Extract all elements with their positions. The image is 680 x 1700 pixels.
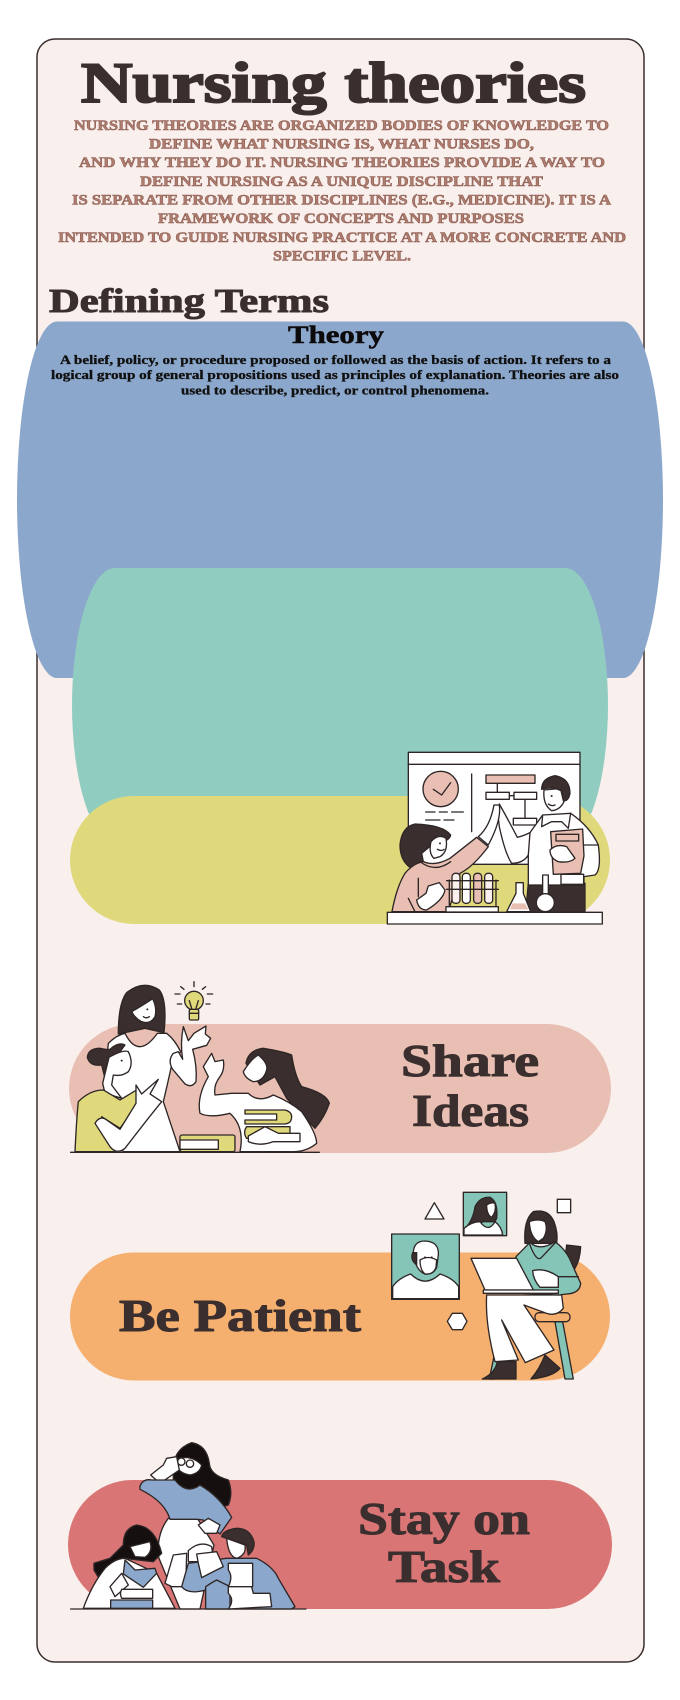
- heading: theory: Theory: [288, 322, 385, 349]
- theory definition: used to describe, predict, or control phenomena.: [181, 384, 489, 398]
- theory definition: [51, 353, 619, 398]
- woman at laptop: [471, 1211, 581, 1379]
- intro text block: FRAMEWORK OF CONCEPTS AND PURPOSES: [158, 210, 524, 227]
- floor line: [71, 1150, 319, 1154]
- theory definition: A belief, policy, or procedure proposed or followed as the basis of action. It refers to a: [60, 353, 611, 367]
- standing woman with glasses: [140, 1443, 232, 1609]
- panel: green term: [72, 568, 608, 842]
- illustration: team solving a puzzle: [71, 1443, 306, 1609]
- illustration: high five in lab: [387, 752, 602, 924]
- video frame: woman: [463, 1192, 507, 1236]
- seated person in yellow: [75, 1044, 162, 1152]
- illustration: video call: [392, 1192, 581, 1379]
- table: [387, 912, 602, 924]
- woman: [392, 805, 500, 912]
- shapes: [425, 1199, 571, 1330]
- intro text block: DEFINE WHAT NURSING IS, WHAT NURSES DO,: [149, 136, 534, 152]
- seated woman with books: [199, 1048, 329, 1152]
- video frame: man: [392, 1234, 459, 1299]
- intro text block: IS SEPARATE FROM OTHER DISCIPLINES (E.G., MEDICINE). IT IS A: [72, 192, 611, 209]
- label: share ideas: [401, 1036, 539, 1136]
- intro text block: NURSING THEORIES ARE ORGANIZED BODIES OF KNOWLEDGE TO: [74, 117, 609, 134]
- title: Nursing theories: [81, 52, 586, 115]
- illustration: three people sharing ideas: [71, 982, 329, 1152]
- heading: defining terms: Defining Terms: [49, 283, 329, 320]
- bulb: [175, 982, 213, 1020]
- intro text block: INTENDED TO GUIDE NURSING PRACTICE AT A MORE CONCRETE AND: [58, 229, 626, 246]
- table line: [71, 1607, 306, 1611]
- standing woman: [105, 985, 211, 1152]
- intro text block: DEFINE NURSING AS A UNIQUE DISCIPLINE THAT: [140, 173, 543, 190]
- label: share ideas: Ideas: [412, 1086, 529, 1136]
- panel: theory: [17, 322, 663, 678]
- man: [498, 776, 599, 912]
- label: stay on task: Task: [388, 1542, 500, 1592]
- intro text block: [58, 117, 626, 265]
- panel: share ideas pill: [69, 1024, 611, 1153]
- label: be patient: Be Patient: [119, 1291, 361, 1341]
- lab equipment: [446, 873, 554, 912]
- label: stay on task: Stay on: [358, 1494, 530, 1544]
- large book: [180, 1135, 235, 1152]
- girl reading: [83, 1525, 187, 1608]
- label: stay on task: [358, 1494, 530, 1592]
- presentation board: [408, 752, 580, 864]
- label: share ideas: Share: [401, 1036, 539, 1086]
- panel: be patient pill: [70, 1252, 610, 1380]
- chair: [489, 1245, 581, 1379]
- theory definition: logical group of general propositions used as principles of explanation. Theories are also: [51, 368, 619, 382]
- intro text block: AND WHY THEY DO IT. NURSING THEORIES PROVIDE A WAY TO: [79, 154, 605, 171]
- panel: stay on task pill: [68, 1480, 612, 1609]
- boy with puzzle: [182, 1528, 295, 1609]
- panel: yellow pill: [70, 796, 610, 924]
- intro text block: SPECIFIC LEVEL.: [273, 248, 411, 265]
